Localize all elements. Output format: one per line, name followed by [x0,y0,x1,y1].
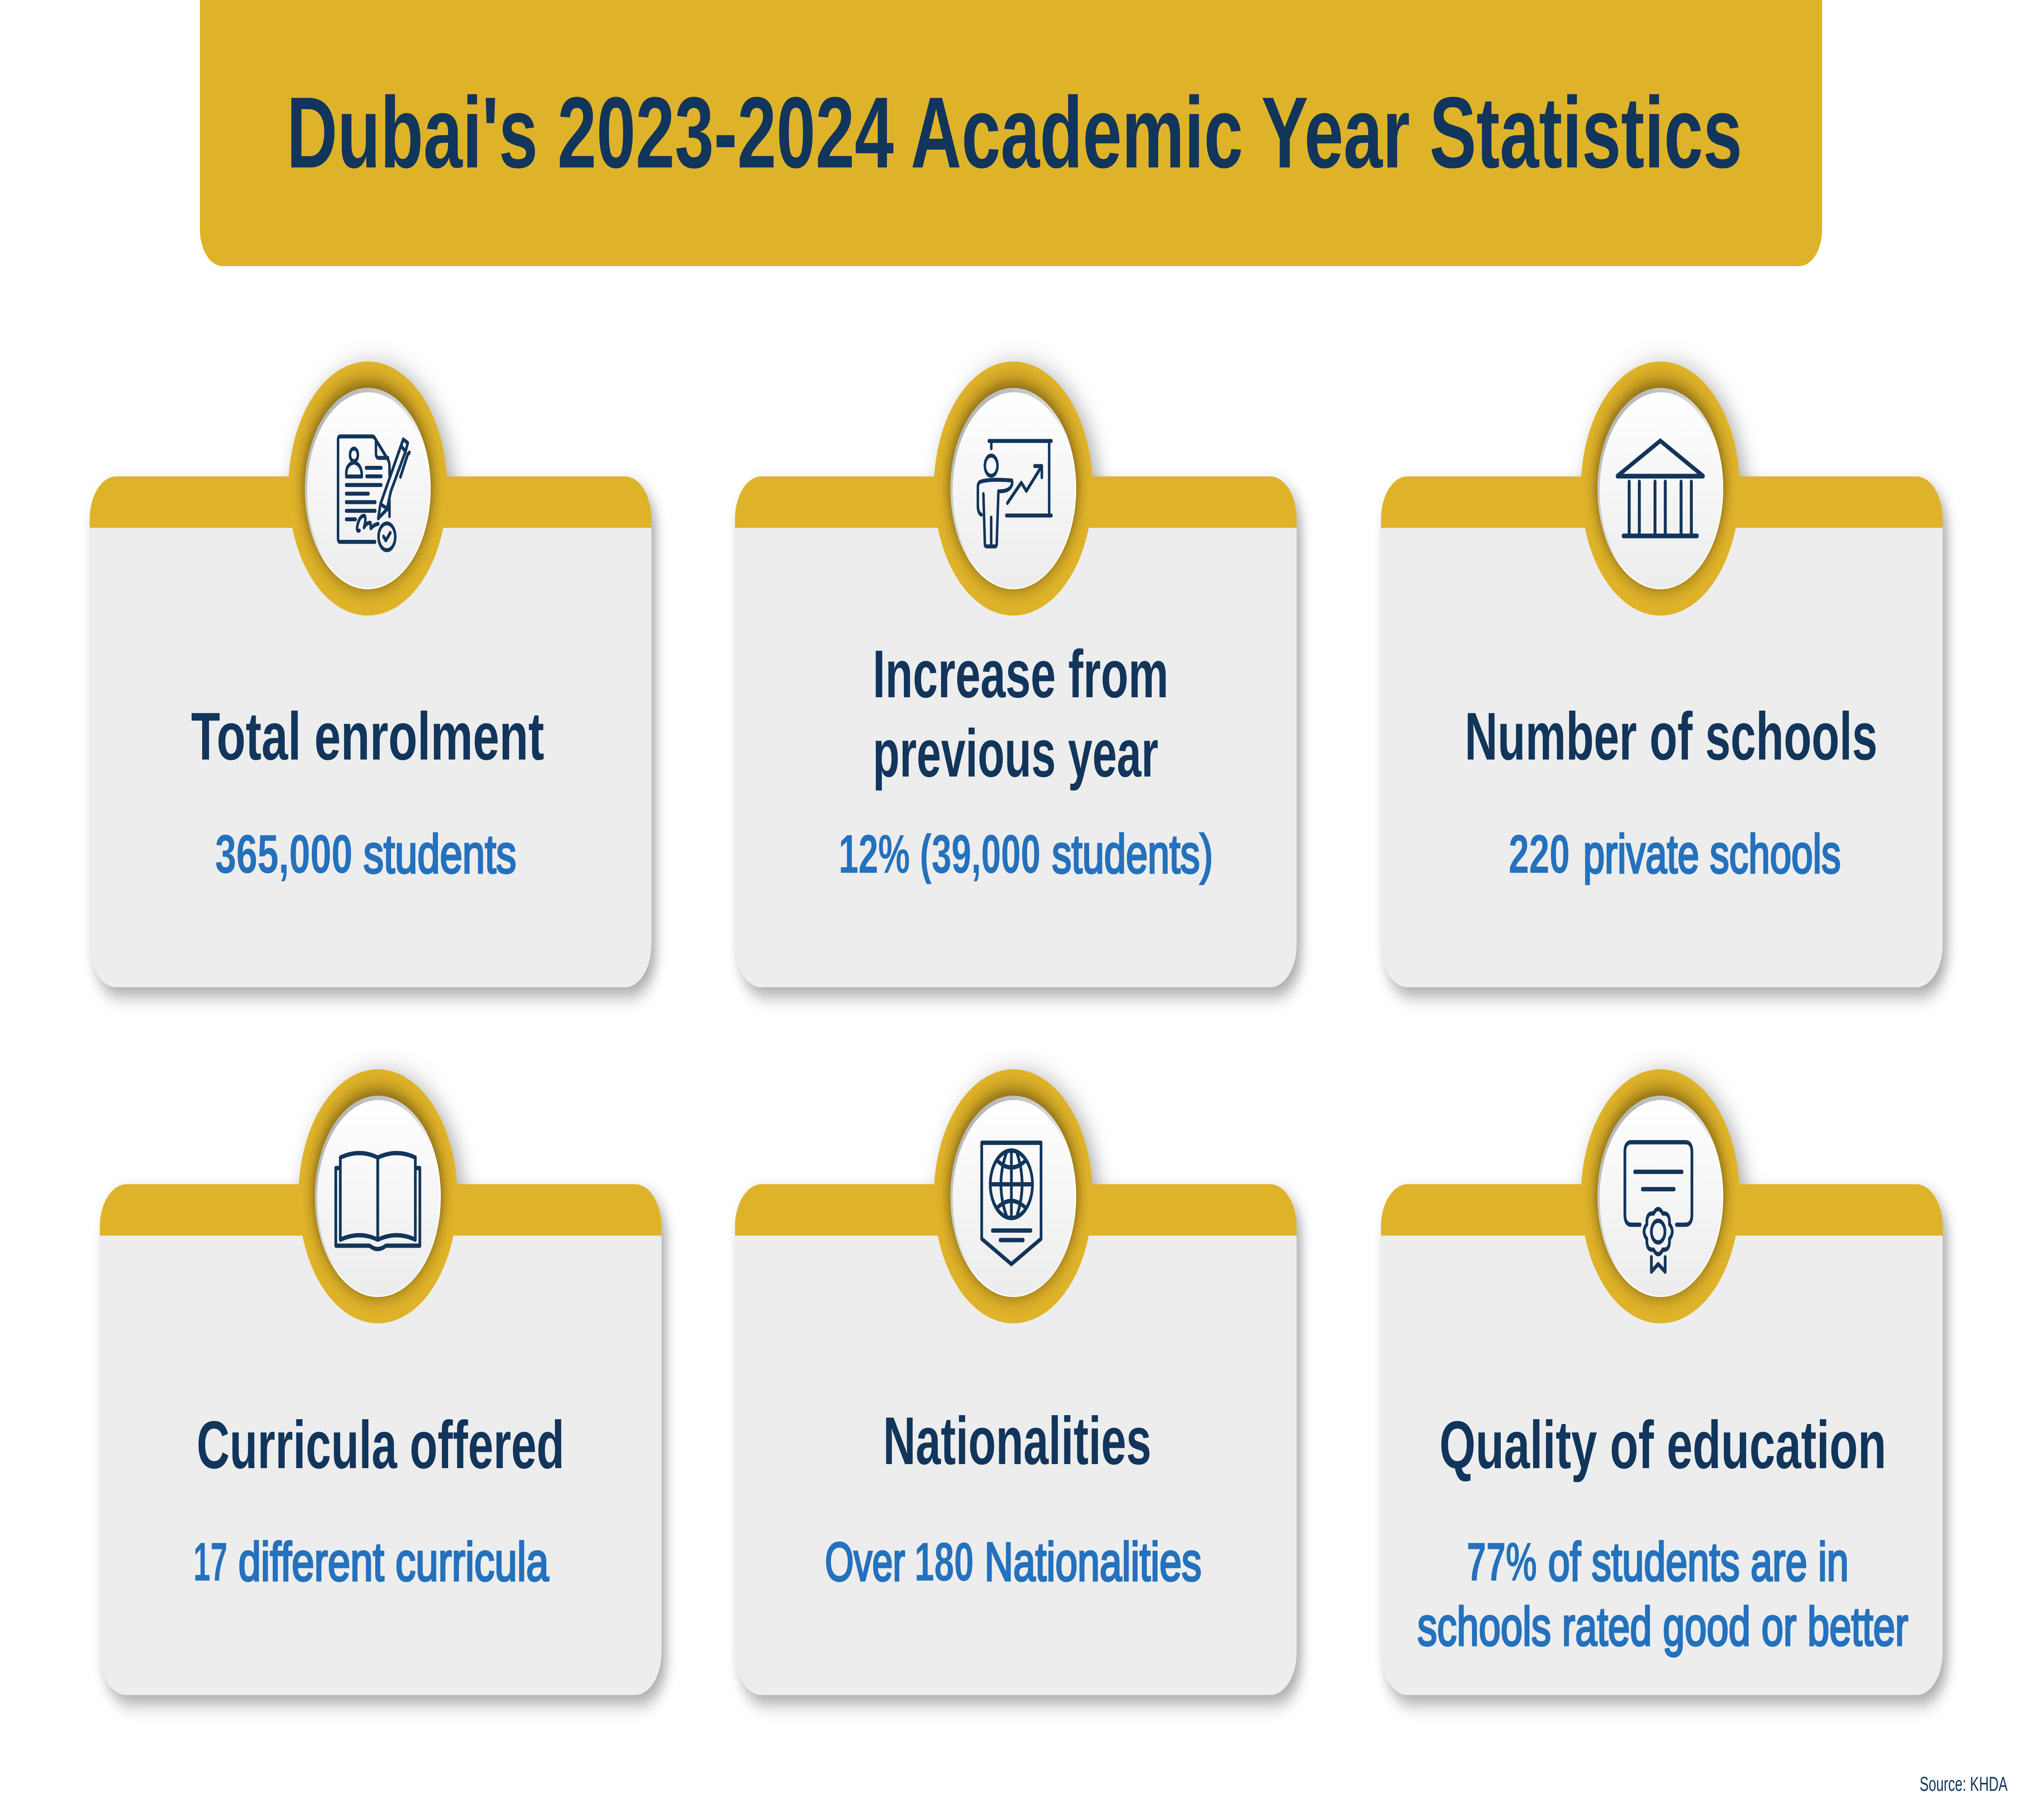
panel: curricula offered [100,1069,662,1695]
value: Over [825,1531,905,1592]
value: 180 [914,1531,974,1592]
value: students [364,823,516,885]
value: 365,000 [215,823,353,885]
heading: previous year [873,715,1158,791]
panel: quality of education [1381,1069,1943,1695]
icon: signed document with pen [338,436,410,550]
source note: Source: KHDA [1920,1772,2008,1795]
panel: increase from previous year [735,362,1297,987]
heading: Total enrolment [191,698,544,774]
value: schools rated good or better [1417,1596,1908,1657]
heading: Number of schools [1465,698,1877,774]
heading: Curricula offered [197,1407,565,1483]
value [839,823,1213,885]
title: Dubai's 2023-2024 Academic Year Statistics [287,76,1742,189]
value: Nationalities [984,1531,1201,1592]
value: 17 [193,1531,228,1592]
value: different curricula [238,1531,549,1592]
title banner [200,0,1822,266]
value: of students are in [1548,1531,1849,1592]
value: students) [1052,823,1213,885]
value [825,1531,1201,1592]
heading: Increase from [873,636,1168,712]
panel: total enrolment [90,362,651,987]
icon: presenter with rising chart [978,441,1051,546]
value: 77% [1467,1531,1537,1592]
icon: open book [336,1153,420,1249]
value [215,823,516,885]
icon: passport with globe [982,1143,1041,1264]
value: 220 [1509,823,1570,885]
heading: Quality of education [1439,1407,1886,1483]
panel: number of schools [1381,362,1943,987]
panel: nationalities [735,1069,1297,1695]
icon: columned institution building [1617,441,1703,536]
heading: Nationalities [883,1403,1151,1479]
value: private schools [1583,823,1841,885]
heading [873,636,1168,791]
value: 12% (39,000 [839,823,1041,885]
icon: certificate with rosette [1625,1142,1692,1272]
value [1417,1531,1908,1657]
value [1509,823,1841,885]
